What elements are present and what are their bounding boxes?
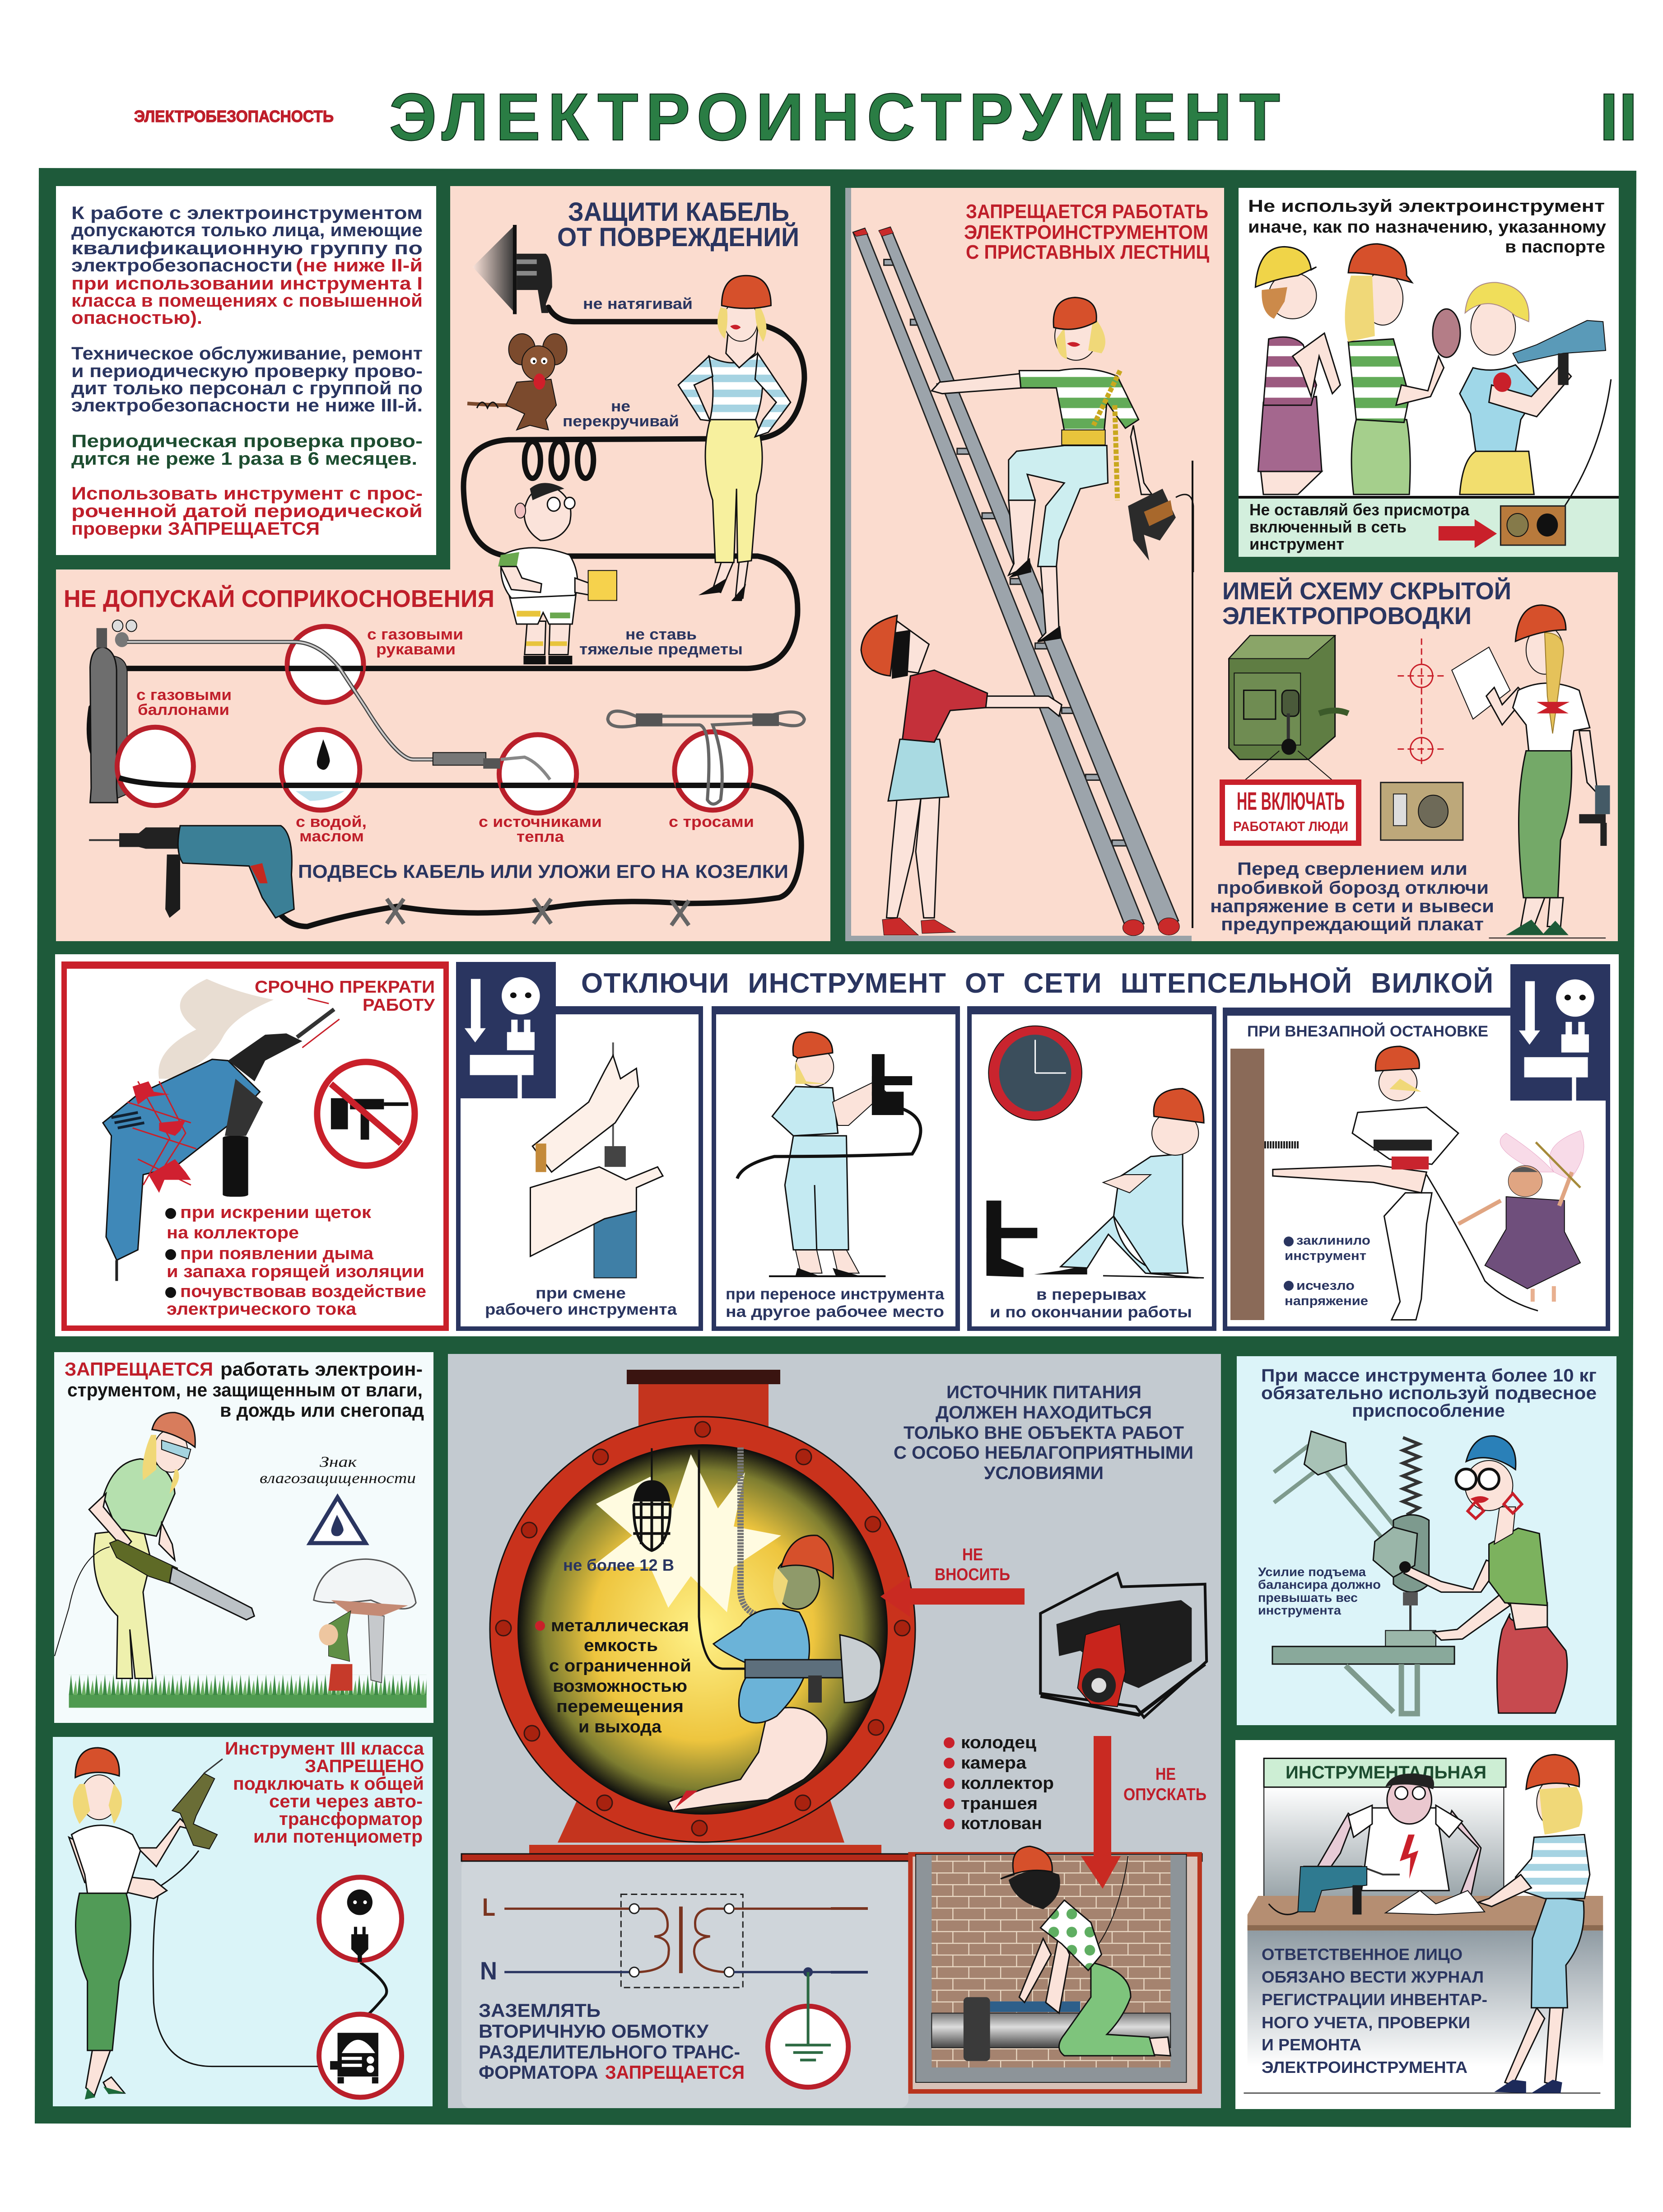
icon: gas hose and torch xyxy=(127,642,550,779)
text: sudden stop: ПРИ ВНЕЗАПНОЙ ОСТАНОВКЕ xyxy=(1247,1022,1488,1040)
panel: tool room xyxy=(1235,1740,1615,2109)
panel: use as intended xyxy=(1239,188,1619,557)
text: balancer note: инструмента xyxy=(1258,1603,1341,1617)
text: moisture prohibition: в дождь или снегопад xyxy=(220,1400,424,1421)
text: do not leave unattended: Не оставляй без присмотра xyxy=(1249,500,1470,519)
text block: overdue: Использовать инструмент с прос- xyxy=(71,484,423,504)
illustration: tool room counter xyxy=(1244,1759,1603,2093)
text: grounding forbidden: ВТОРИЧНУЮ ОБМОТКУ xyxy=(479,2021,709,2042)
caption: в перерывах xyxy=(1036,1286,1147,1303)
text: metal tank xyxy=(535,1616,691,1736)
text: before drilling: Перед сверлением или xyxy=(1237,859,1467,879)
icon: blue drill xyxy=(89,826,294,918)
contact labels: с газовыми xyxy=(367,626,463,643)
text: protection mark xyxy=(260,1454,416,1487)
text: grounding forbidden xyxy=(479,2000,745,2083)
list: stop conditions: почувствовав воздействие xyxy=(180,1282,426,1301)
heading: over 10 kg: обязательно используй подвесное xyxy=(1261,1383,1597,1403)
labels: L and N: N xyxy=(480,1956,497,1985)
contact labels: маслом xyxy=(299,828,364,845)
text: before drilling: пробивкой борозд отключи xyxy=(1217,878,1489,898)
arrow: down into trench xyxy=(1081,1736,1121,1889)
text: responsible person xyxy=(1262,1945,1487,2077)
heading: use as intended: Не используй электроинструмент xyxy=(1248,197,1605,216)
text: responsible person: РЕГИСТРАЦИИ ИНВЕНТАР- xyxy=(1262,1990,1487,2009)
text: moisture prohibition: струментом, не защищенным от влаги, xyxy=(67,1379,423,1400)
panel: suspension device xyxy=(1237,1356,1616,1725)
text: class III xyxy=(225,1739,424,1847)
caption xyxy=(485,1284,677,1318)
icon: moisture triangle xyxy=(310,1497,366,1543)
list: stop conditions: и запаха горящей изоляции xyxy=(167,1262,424,1281)
text: class III: трансформатор xyxy=(279,1809,423,1829)
figure: woman below ladder xyxy=(861,616,1062,935)
text: stop work xyxy=(255,978,435,1015)
panel: ladder prohibition xyxy=(845,188,1224,941)
label: do not lower: НЕ xyxy=(1155,1765,1176,1784)
panel: class III tool xyxy=(53,1737,433,2106)
text block: admission xyxy=(71,203,423,328)
wiring targets xyxy=(1397,639,1445,765)
list: confined spaces: колодец xyxy=(961,1733,1037,1752)
list: confined spaces: котлован xyxy=(961,1814,1042,1833)
figure: woman in tank xyxy=(668,1447,881,1812)
list: stop conditions: при искрении щеток xyxy=(180,1203,372,1222)
figure: ladder xyxy=(853,227,1179,936)
labels: cable warnings: перекручивай xyxy=(563,413,679,430)
illustration: balancer drill press xyxy=(1272,1431,1454,1713)
panel: moving to another place xyxy=(712,1006,960,1329)
arrow: into tank xyxy=(880,1576,1025,1617)
illustration: grass xyxy=(69,1675,427,1708)
text block: overdue: роченной датой периодической xyxy=(71,501,423,521)
labels: L and N xyxy=(480,1893,497,1985)
caption: на другое рабочее место xyxy=(726,1303,944,1321)
text: moisture prohibition: ЗАПРЕЩАЕТСЯ xyxy=(65,1358,213,1380)
icon: caged lamp xyxy=(633,1448,670,1550)
figure: hands with drill xyxy=(530,1042,663,1278)
text: moisture prohibition xyxy=(65,1358,424,1421)
list: stop reasons: заклинило xyxy=(1296,1233,1370,1248)
label: do not bring in xyxy=(935,1545,1010,1584)
text: do not leave unattended: включенный в сеть xyxy=(1249,518,1407,536)
heading: power source: УСЛОВИЯМИ xyxy=(984,1463,1104,1483)
heading: ladder: ЭЛЕКТРОИНСТРУМЕНТОМ xyxy=(964,221,1208,243)
labels: L and N: L xyxy=(482,1893,495,1921)
text block: maintenance: дит только персонал с группой по xyxy=(71,378,423,398)
section label: ЭЛЕКТРОБЕЗОПАСНОСТЬ xyxy=(134,107,334,126)
heading: ladder: ЗАПРЕЩАЕТСЯ РАБОТАТЬ xyxy=(966,201,1208,223)
icon: generator xyxy=(1040,1573,1206,1717)
icon: drill and logbook xyxy=(1269,1867,1485,1914)
icon: arrow and socket xyxy=(1439,506,1565,548)
figure: gnome under mushroom xyxy=(314,1559,416,1691)
heading: wiring plan: ЭЛЕКТРОПРОВОДКИ xyxy=(1222,602,1472,630)
heading: power source: ДОЛЖЕН НАХОДИТЬСЯ xyxy=(936,1403,1152,1423)
list: confined spaces: коллектор xyxy=(961,1774,1054,1793)
figure: kicking woman xyxy=(1264,1046,1458,1320)
list: confined spaces: камера xyxy=(961,1754,1027,1773)
figure: fairy xyxy=(1426,1130,1584,1311)
figure: woman with chainsaw xyxy=(55,1413,254,1679)
figure: woman in goggles xyxy=(1399,1436,1567,1713)
lower grey area xyxy=(461,1858,908,2108)
figure: three women xyxy=(1255,244,1611,523)
text block: maintenance xyxy=(71,344,423,415)
text block: maintenance: электробезопасности не ниже III-й. xyxy=(71,396,423,415)
text block: admission: (не ниже II-й xyxy=(296,256,423,275)
list: confined spaces: траншея xyxy=(961,1794,1038,1813)
text: responsible person: И РЕМОНТА xyxy=(1262,2035,1361,2054)
icon: gas cylinders xyxy=(90,620,137,803)
icon: switch box xyxy=(1229,635,1348,783)
list: stop reasons: инструмент xyxy=(1285,1249,1366,1263)
icon: wall clock xyxy=(988,1026,1082,1120)
sign: no drill xyxy=(317,1062,415,1166)
text: stop work: РАБОТУ xyxy=(363,996,435,1015)
text: stop work: СРОЧНО ПРЕКРАТИ xyxy=(255,978,435,997)
list: stop reasons: напряжение xyxy=(1285,1294,1368,1308)
text: class III: подключать к общей xyxy=(233,1774,424,1794)
panel: confined space xyxy=(448,1354,1221,2108)
figure: woman with striped top xyxy=(678,275,791,601)
text: metal tank: емкость xyxy=(584,1636,658,1655)
label: tool room: ИНСТРУМЕНТАЛЬНАЯ xyxy=(1286,1763,1486,1783)
contact labels: тепла xyxy=(517,828,564,845)
panel: changing the tool xyxy=(456,1006,703,1329)
heading: power source xyxy=(894,1382,1193,1483)
text block: inspection: дится не реже 1 раза в 6 месяцев. xyxy=(71,449,417,469)
text: metal tank: металлическая xyxy=(551,1616,689,1635)
figure: woman in trench xyxy=(990,1846,1170,2056)
heading: wiring plan: ИМЕЙ СХЕМУ СКРЫТОЙ xyxy=(1222,577,1511,605)
caption: при смене xyxy=(536,1284,626,1302)
icon: sparking drill xyxy=(103,999,340,1281)
list: stop conditions: на коллекторе xyxy=(167,1223,299,1242)
icon: wall socket xyxy=(1381,783,1463,840)
text: grounding forbidden: РАЗДЕЛИТЕЛЬНОГО ТРАНС- xyxy=(479,2041,740,2063)
panel: protect the cable xyxy=(56,186,830,941)
text: metal tank: перемещения xyxy=(556,1697,684,1716)
cable line xyxy=(89,307,804,927)
heading: power source: ИСТОЧНИК ПИТАНИЯ xyxy=(946,1382,1141,1402)
text: class III: или потенциометр xyxy=(253,1827,423,1847)
text: class III: сети через авто- xyxy=(269,1792,423,1811)
text: before drilling xyxy=(1210,859,1494,934)
text: voltage limit: не более 12 В xyxy=(563,1556,674,1574)
text block: admission: квалификационную группу по xyxy=(71,238,423,258)
caption: рабочего инструмента xyxy=(485,1301,677,1318)
icon: autotransformer circle xyxy=(319,2014,402,2097)
text: before drilling: напряжение в сети и вывеси xyxy=(1210,896,1494,916)
heading: over 10 kg xyxy=(1261,1366,1597,1421)
heading: use as intended: иначе, как по назначению, указанному xyxy=(1248,218,1606,237)
contact labels: с газовыми xyxy=(136,686,232,704)
labels: cable warnings: тяжелые предметы xyxy=(579,641,743,658)
text: class III: Инструмент III класса xyxy=(225,1739,424,1759)
text: metal tank: с ограниченной xyxy=(549,1657,691,1675)
sign: do not switch on xyxy=(1222,782,1359,843)
smoke xyxy=(158,979,274,1079)
text block: admission: опасностью). xyxy=(71,308,202,328)
text block: admission: К работе с электроинструментом xyxy=(71,203,423,223)
poster number: II xyxy=(1599,80,1638,154)
panel: admission rules xyxy=(56,186,436,555)
text block: overdue: проверки ЗАПРЕЩАЕТСЯ xyxy=(71,519,320,539)
heading: over 10 kg: При массе инструмента более 10 кг xyxy=(1261,1366,1597,1386)
list: stop conditions xyxy=(165,1203,426,1319)
text: responsible person: ОБЯЗАНО ВЕСТИ ЖУРНАЛ xyxy=(1262,1968,1484,1986)
list: confined spaces xyxy=(944,1733,1054,1833)
label: do not bring in: НЕ xyxy=(962,1545,983,1564)
panel: moisture protection xyxy=(54,1352,433,1723)
list: stop conditions: электрического тока xyxy=(167,1300,357,1319)
caption: и по окончании работы xyxy=(990,1303,1192,1321)
panel: wiring plan xyxy=(1192,461,1618,941)
text: do not leave unattended: инструмент xyxy=(1249,535,1344,553)
labels: cable warnings xyxy=(563,295,743,658)
title: ЭЛЕКТРОИНСТРУМЕНТ xyxy=(389,80,1280,154)
heading: protect cable xyxy=(557,197,799,252)
heading: use as intended: в паспорте xyxy=(1505,238,1605,257)
icon: unplug sign right xyxy=(1510,964,1610,1101)
text: responsible person: НОГО УЧЕТА, ПРОВЕРКИ xyxy=(1262,2013,1470,2032)
figure: woman carrying drill xyxy=(737,1032,921,1276)
contact labels: рукавами xyxy=(376,641,456,658)
caption: при переносе инструмента xyxy=(726,1285,945,1303)
illustration: tank neck and base xyxy=(461,1370,1202,1861)
heading: unplug from mains: ОТКЛЮЧИ ИНСТРУМЕНТ ОТ СЕТИ ШТЕПСЕЛЬНОЙ ВИЛКОЙ xyxy=(581,967,1493,999)
panel: sudden stop xyxy=(1223,1008,1610,1329)
figure: sitting woman xyxy=(987,1088,1204,1278)
contact labels: с водой, xyxy=(296,813,367,831)
text: grounding forbidden: ЗАЗЕМЛЯТЬ xyxy=(479,2000,601,2021)
text block: maintenance: Техническое обслуживание, ремонт xyxy=(71,344,423,364)
text block: overdue xyxy=(71,484,423,539)
icon: brick wall xyxy=(1230,1049,1264,1320)
icon: grounding circle xyxy=(768,1967,848,2087)
text block: admission: электробезопасности xyxy=(71,256,293,275)
heading: power source: С ОСОБО НЕБЛАГОПРИЯТНЫМИ xyxy=(894,1443,1193,1463)
illustration: trench xyxy=(910,1854,1200,2091)
text: responsible person: ОТВЕТСТВЕННОЕ ЛИЦО xyxy=(1262,1945,1463,1964)
figure: woman on ladder xyxy=(932,298,1193,927)
heading: ladder: С ПРИСТАВНЫХ ЛЕСТНИЦ xyxy=(966,241,1209,263)
list: stop conditions: при появлении дыма xyxy=(180,1244,374,1263)
list: stop reasons xyxy=(1284,1233,1370,1308)
icon: unplug sign left xyxy=(456,962,556,1098)
diagram: isolating transformer xyxy=(504,1894,831,1988)
text: responsible person: ЭЛЕКТРОИНСТРУМЕНТА xyxy=(1262,2058,1467,2077)
figure: man with beer xyxy=(498,483,617,664)
icon: steel rope xyxy=(608,711,804,804)
text block: admission: допускаются только лица, имеющие xyxy=(71,220,423,240)
text: class III: ЗАПРЕЩЕНО xyxy=(305,1756,424,1776)
labels: cable warnings: не xyxy=(611,398,630,415)
text: protection mark: влагозащищенности xyxy=(260,1470,416,1487)
heading: avoid contact: НЕ ДОПУСКАЙ СОПРИКОСНОВЕНИЯ xyxy=(64,585,494,612)
contact circles xyxy=(117,626,751,813)
text: balancer note: балансира должно xyxy=(1258,1577,1381,1591)
icon: wall plug xyxy=(473,225,552,314)
text: metal tank: возможностью xyxy=(553,1677,687,1696)
text: hang the cable: ПОДВЕСЬ КАБЕЛЬ ИЛИ УЛОЖИ ЕГО НА КОЗЕЛКИ xyxy=(298,861,788,882)
labels: cable warnings: не ставь xyxy=(625,626,697,643)
text: balancer note xyxy=(1258,1565,1381,1617)
text: do not leave unattended xyxy=(1249,500,1470,553)
sign: do not switch on: РАБОТАЮТ ЛЮДИ xyxy=(1233,819,1348,834)
text: metal tank: и выхода xyxy=(578,1717,662,1736)
heading: over 10 kg: приспособление xyxy=(1352,1401,1505,1421)
heading: ladder xyxy=(964,201,1209,263)
text: grounding forbidden: ЗАПРЕЩАЕТСЯ xyxy=(605,2062,745,2083)
text: balancer note: Усилие подъема xyxy=(1258,1565,1366,1579)
figure: mouse xyxy=(467,334,567,430)
text: grounding forbidden: ФОРМАТОРА xyxy=(479,2062,598,2083)
caption xyxy=(726,1285,945,1321)
figure: storekeeper xyxy=(1311,1773,1481,1899)
heading: protect cable: ЗАЩИТИ КАБЕЛЬ xyxy=(568,197,789,227)
text: protection mark: Знак xyxy=(320,1454,357,1470)
text block: inspection: Периодическая проверка прово- xyxy=(71,431,423,451)
middle band background xyxy=(55,954,1619,1336)
text: before drilling: предупреждающий плакат xyxy=(1221,915,1484,934)
figure: woman at counter xyxy=(1478,1755,1590,2093)
label: do not lower: ОПУСКАТЬ xyxy=(1123,1785,1206,1804)
text block: inspection xyxy=(71,431,423,469)
heading: use as intended xyxy=(1248,197,1606,257)
icon: cable trestles xyxy=(387,899,689,925)
text: balancer note: превышать вес xyxy=(1258,1591,1358,1605)
sign: do not switch on: НЕ ВКЛЮЧАТЬ xyxy=(1237,787,1345,815)
label: do not bring in: ВНОСИТЬ xyxy=(935,1565,1010,1584)
illustration: tank with lamp xyxy=(490,1417,915,1842)
contact labels: баллонами xyxy=(138,701,229,719)
figure: woman with plan xyxy=(1452,605,1610,938)
labels: cable warnings: не натягивай xyxy=(583,295,693,313)
diagram: line extensions xyxy=(831,1909,868,1972)
heading: power source: ТОЛЬКО ВНЕ ОБЪЕКТА РАБОТ xyxy=(904,1423,1184,1443)
text block: admission: класса в помещениях с повышенной xyxy=(71,291,423,311)
caption xyxy=(990,1286,1192,1321)
label: do not lower xyxy=(1123,1765,1206,1804)
panel: breaks xyxy=(967,1006,1216,1329)
contact labels xyxy=(136,626,754,845)
icon: socket and plug circle xyxy=(319,1877,402,2021)
text block: admission: при использовании инструмента I xyxy=(71,274,423,294)
contact labels: с тросами xyxy=(669,813,754,831)
heading: wiring plan xyxy=(1222,577,1511,630)
contact labels: с источниками xyxy=(479,813,602,831)
figure: woman with cordless drill xyxy=(69,1748,323,2100)
text: moisture prohibition: работать электроин- xyxy=(220,1358,423,1380)
text block: maintenance: и периодическую проверку прово- xyxy=(71,361,423,381)
panel: stop work immediately xyxy=(61,961,449,1328)
heading: protect cable: ОТ ПОВРЕЖДЕНИЙ xyxy=(557,223,799,252)
list: stop reasons: исчезло xyxy=(1296,1279,1355,1293)
